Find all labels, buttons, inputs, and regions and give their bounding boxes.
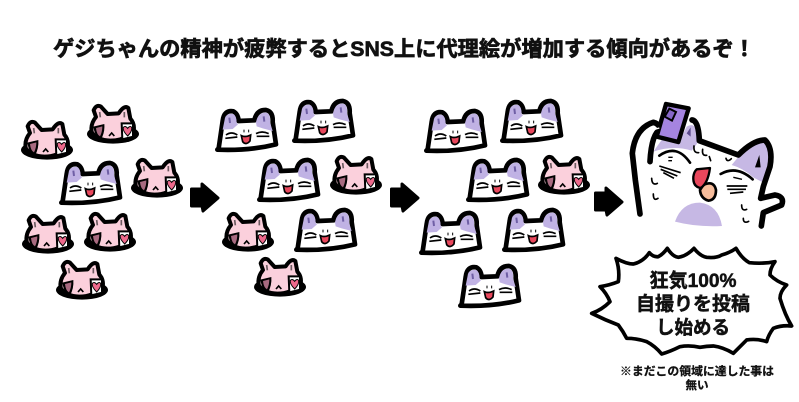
callout text line 1: 狂気100% [650,270,736,292]
arrow: third stage to selfie cat [596,188,622,215]
callout text line 2: 自撮りを投稿 [636,293,750,315]
group: second stage cats [217,101,382,297]
icon: large cat taking a selfie [632,104,782,226]
callout: burst with text [592,248,792,354]
footnote [620,364,775,392]
footnote: 無い [686,378,708,392]
footnote: ※まだこの領域に達した事は [620,364,775,378]
burst outline [592,248,792,354]
title: ゲジちゃんの精神が疲弊するとSNS上に代理絵が増加する傾向があるぞ！ [53,37,755,61]
arrow: first to second stage [192,184,218,211]
group: first stage cats [21,106,183,300]
group: third stage cats [421,101,590,306]
callout text line 3: し始める [656,317,730,338]
arrow: second to third stage [392,184,418,211]
